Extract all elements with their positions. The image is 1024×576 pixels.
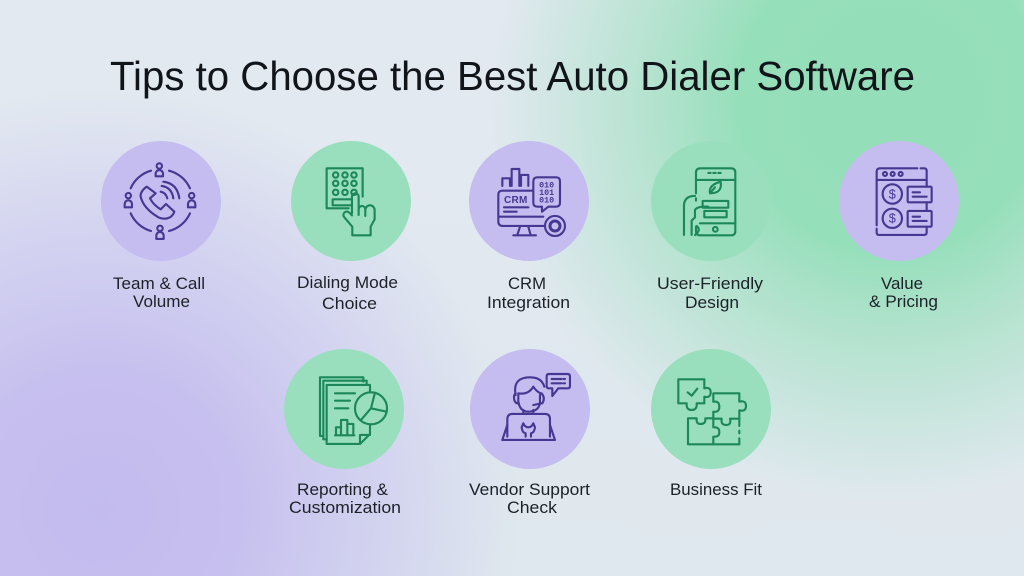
label: Reporting &: [297, 480, 389, 499]
tip: Reporting & Customization: [284, 349, 404, 517]
label: Team & Call: [113, 274, 205, 293]
tip: Vendor Support Check: [469, 349, 590, 517]
label: CRM: [508, 274, 546, 293]
label: Choice: [322, 294, 377, 313]
icon: support agent with headset and chat bubble: [502, 374, 570, 440]
label: Customization: [289, 498, 401, 517]
label: Value: [881, 274, 923, 293]
icon: puzzle pieces with check mark: [678, 379, 746, 444]
title: Tips to Choose the Best Auto Dialer Software: [110, 53, 915, 99]
label: Design: [685, 293, 739, 312]
icon: CRM monitor with chat and gear: 010: [539, 196, 554, 206]
label: & Pricing: [869, 292, 938, 311]
label: User-Friendly: [657, 274, 764, 293]
label: Vendor Support: [469, 480, 590, 499]
icon: report pages with pie chart: [320, 377, 387, 444]
icon: keypad and pressing hand: [327, 168, 375, 235]
tip: Business Fit: [651, 349, 771, 499]
icon: CRM monitor with chat and gear: [498, 169, 565, 236]
tip: Team & Call Volume: [101, 141, 221, 311]
icon: CRM monitor with chat and gear: CRM: [504, 195, 527, 206]
icon: phone surrounded by team members: [125, 163, 195, 239]
tip: Dialing Mode Choice: [291, 141, 411, 313]
icon: hand holding smartphone: [684, 168, 735, 235]
icon: pricing web page: $: [889, 187, 896, 201]
icon: pricing web page: [877, 168, 932, 235]
label: Dialing Mode: [297, 273, 398, 292]
tip: Value & Pricing: [839, 141, 959, 311]
icon: CRM monitor with chat and gear: 010: [539, 180, 554, 190]
tip: User-Friendly Design: [651, 141, 771, 312]
label: Integration: [487, 293, 570, 312]
label: Check: [507, 498, 558, 517]
icon: pricing web page: $: [889, 212, 896, 226]
tip: CRM Integration: [469, 141, 589, 312]
icon: CRM monitor with chat and gear: 101: [539, 188, 554, 198]
label: Volume: [133, 292, 190, 311]
label: Business Fit: [670, 480, 762, 499]
